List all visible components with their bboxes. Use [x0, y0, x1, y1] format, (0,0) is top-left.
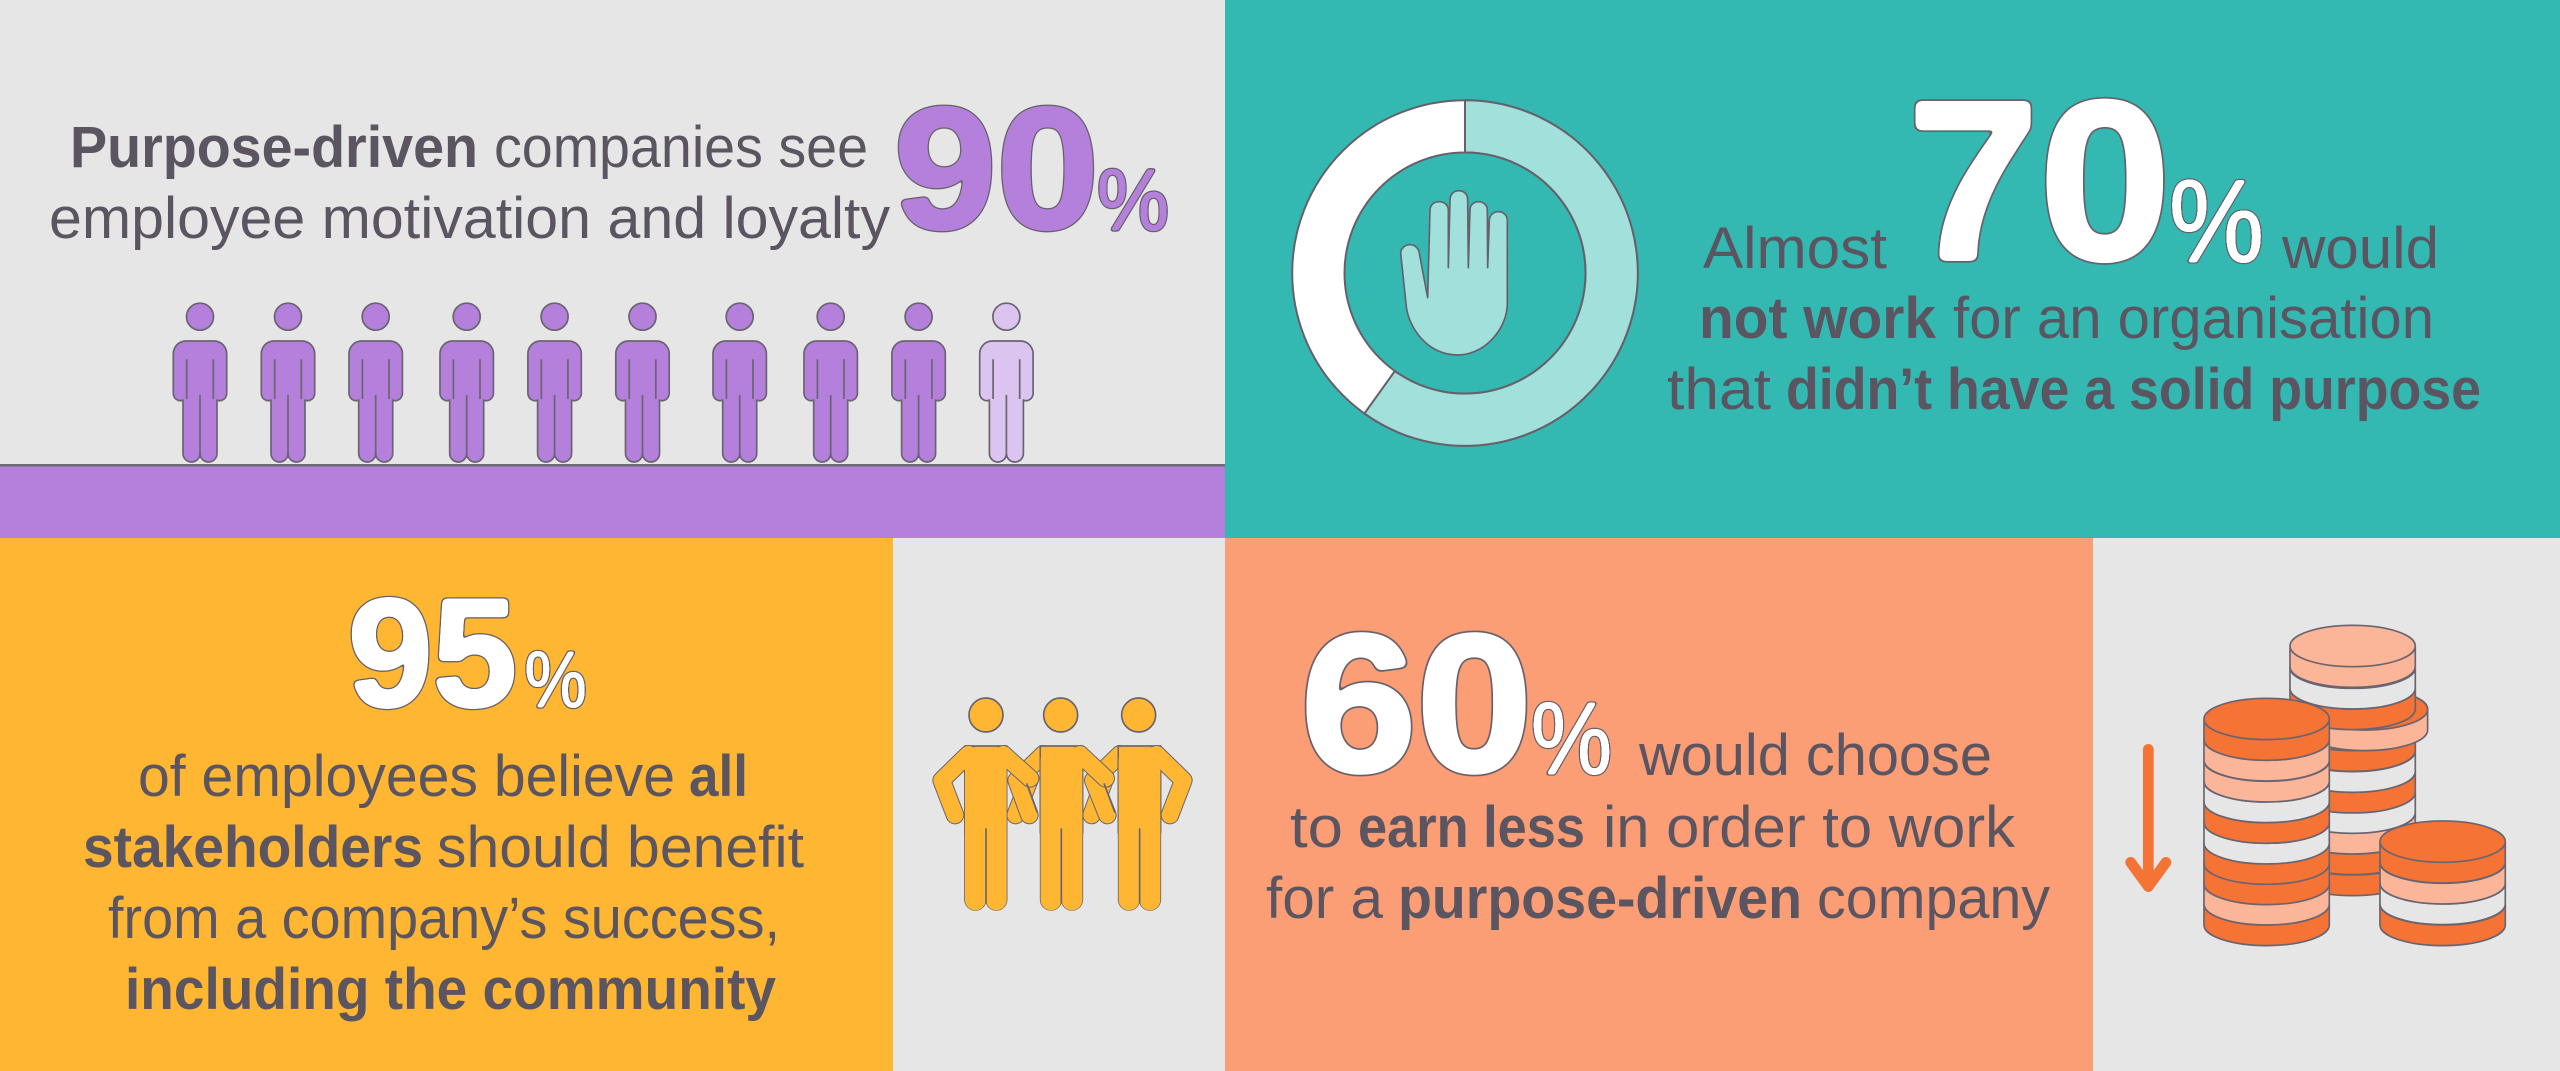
icon: coin stacks and down arrow — [2131, 625, 2505, 946]
forearms behind — [1016, 778, 1105, 815]
heading: purpose-driven text: Purpose-driven — [70, 115, 478, 180]
panel: three people — [893, 538, 1225, 1071]
person 5 — [528, 303, 581, 462]
text: would choose to earn less — [1266, 723, 2050, 931]
person 10: light — [980, 303, 1033, 462]
text: would choose to earn less: earn less — [1358, 795, 1585, 860]
stat: 90 percent: % — [1097, 152, 1169, 249]
panel: earn less — [1225, 538, 2093, 1071]
person 1 — [173, 303, 227, 462]
panel: motivation and loyalty — [0, 0, 1225, 538]
text: would choose to earn less: to — [1290, 795, 1343, 860]
person 8 — [804, 303, 857, 462]
stat: 90 percent: 90 — [894, 71, 1099, 265]
person 7 — [713, 303, 766, 462]
coin stack: left tall — [2204, 698, 2329, 946]
text: would choose to earn less: in order to work — [1603, 795, 2016, 860]
stat: 90 percent — [894, 71, 1169, 265]
panel: would not work — [1225, 0, 2560, 538]
stat: 60 percent: % — [1531, 681, 1612, 796]
people row: ten figures, nine highlighted — [173, 303, 1033, 462]
person 4 — [440, 303, 493, 462]
text: employees believe — [83, 744, 804, 1022]
left arms of figures two and three — [1017, 754, 1120, 815]
coin stack: right short — [2380, 821, 2505, 946]
panel: stakeholders — [0, 538, 893, 1071]
arrow: down — [2131, 749, 2166, 887]
figure one — [942, 698, 1037, 903]
text: would choose to earn less: for a — [1266, 866, 1384, 931]
text: would not work for an organisation — [1667, 216, 2481, 422]
text: employees believe: including the community — [125, 957, 776, 1022]
text: employees believe: should benefit — [437, 815, 804, 880]
person 2 — [261, 303, 315, 462]
stat: 95 percent: % — [525, 635, 587, 724]
text: employees believe: stakeholders — [83, 815, 423, 880]
person 3 — [349, 303, 402, 462]
text: would not work for an organisation: would — [2281, 216, 2439, 281]
person 9 — [892, 303, 945, 462]
heading: purpose-driven text — [49, 115, 890, 251]
heading: purpose-driven text: companies see — [494, 115, 868, 180]
figure two — [1040, 698, 1115, 903]
stat: 70 percent: 70 — [1907, 55, 2171, 308]
person 6 — [616, 303, 669, 462]
panel: coins — [2093, 538, 2560, 1071]
text: would not work for an organisation: Almost — [1703, 216, 1887, 281]
stat: 60 percent: 60 — [1301, 594, 1532, 813]
figure three — [1118, 698, 1183, 903]
icon: three linked figures — [942, 698, 1183, 903]
icon: raised hand — [1401, 191, 1507, 355]
text: would not work for an organisation: not work — [1699, 286, 1937, 351]
purple floor bar — [0, 464, 1225, 538]
text: would choose to earn less: purpose-driven — [1398, 866, 1802, 931]
coin stack: back — [2290, 625, 2428, 896]
text: would choose to earn less: company — [1817, 866, 2050, 931]
text: would not work for an organisation: that — [1667, 357, 1771, 422]
stat: 95 percent: 95 — [348, 567, 517, 739]
stat: 70 percent: % — [2169, 156, 2264, 288]
text: employees believe: all — [689, 744, 748, 809]
donut chart — [1292, 100, 1638, 446]
heading: purpose-driven text: employee motivation and loyalty — [49, 186, 890, 251]
text: would not work for an organisation: for an organisation — [1953, 286, 2434, 351]
text: would not work for an organisation: didn’t have a solid purpose — [1786, 357, 2481, 422]
text: employees believe: of employees believe — [138, 744, 675, 809]
text: would choose to earn less: would choose — [1638, 723, 1992, 788]
text: employees believe: from a company’s success, — [108, 886, 780, 951]
